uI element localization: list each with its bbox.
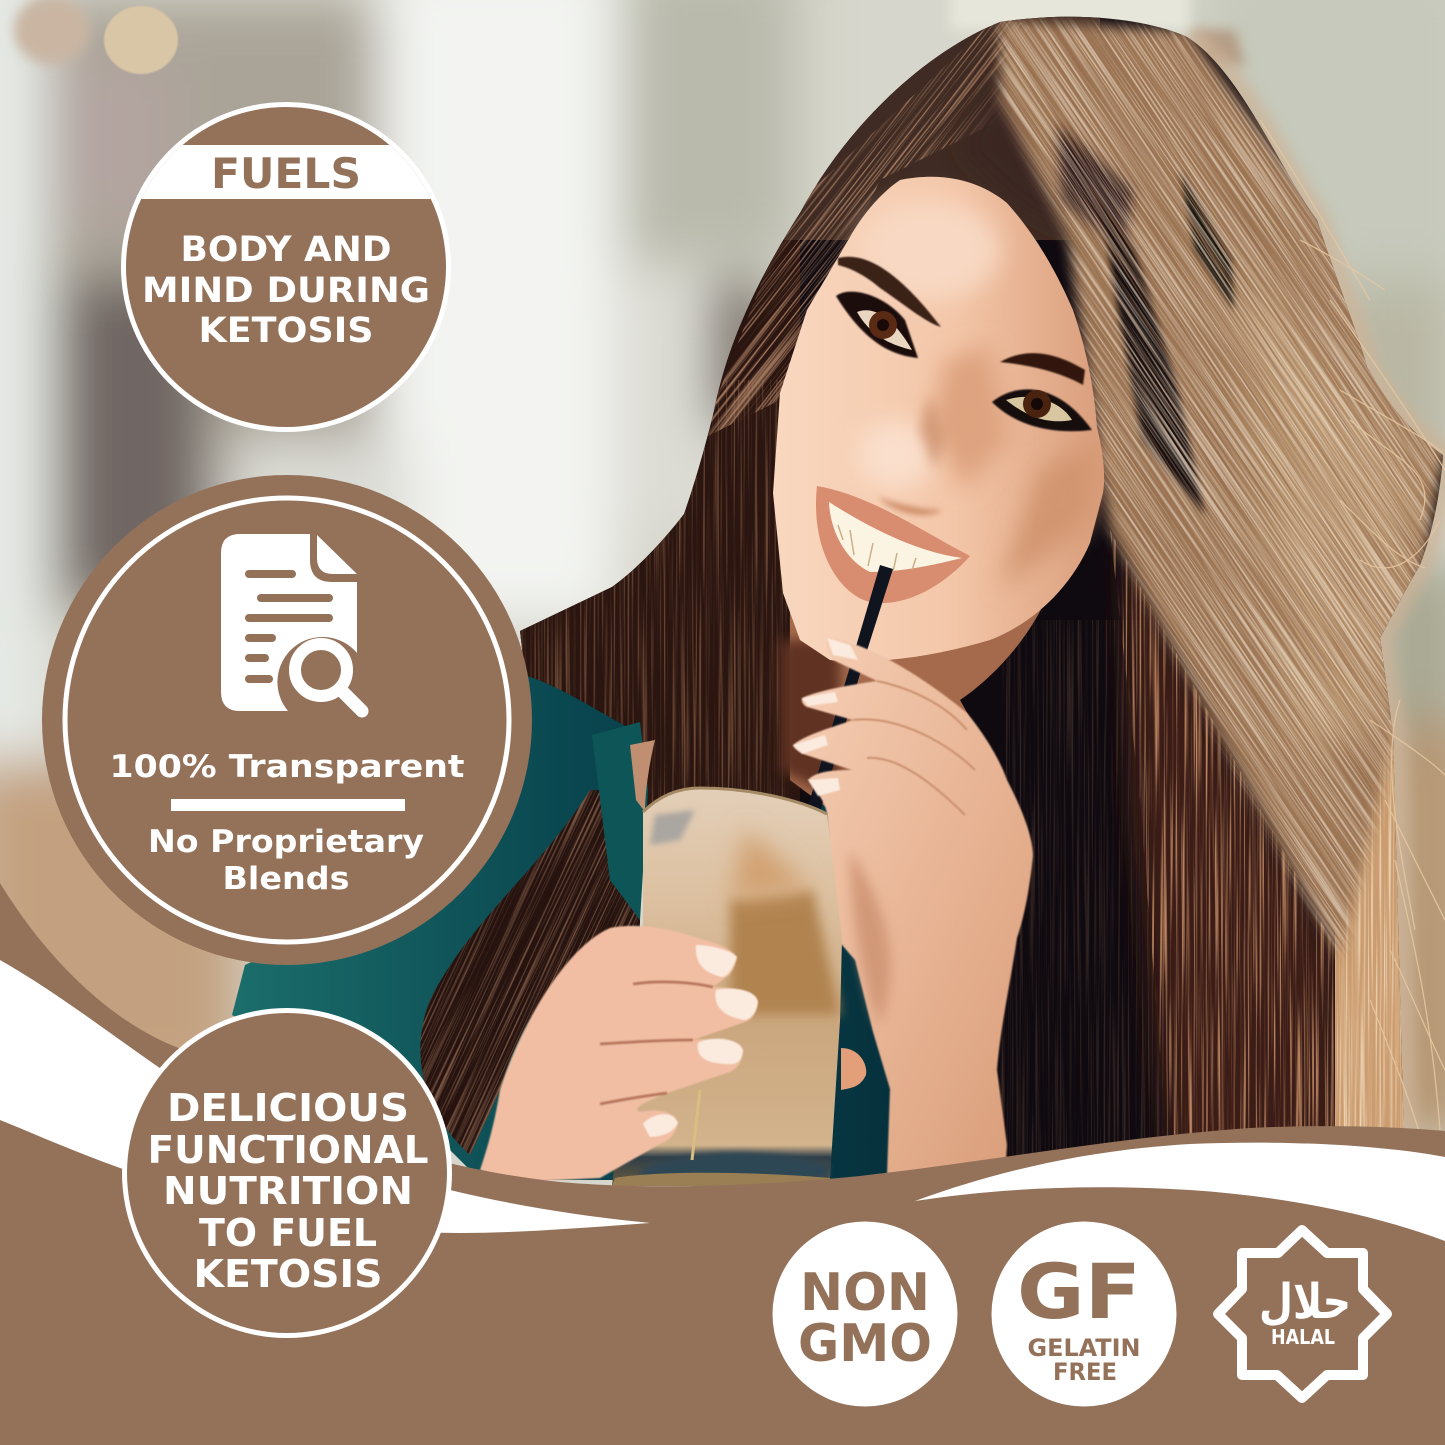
panel: fuels badge bbox=[120, 102, 452, 432]
hair: main mass bbox=[520, 16, 1443, 1157]
text: halal: HALAL bbox=[1271, 1325, 1335, 1349]
hair: left lock bbox=[420, 790, 640, 1155]
text: no proprietary blends: No Proprietary bbox=[148, 824, 424, 860]
text: body and mind during ketosis: KETOSIS bbox=[198, 311, 374, 351]
text: body and mind during ketosis bbox=[142, 230, 430, 351]
face bbox=[773, 177, 1104, 661]
text: no proprietary blends: Blends bbox=[222, 861, 350, 897]
brown wave band bbox=[0, 883, 1445, 1445]
text: body and mind during ketosis: MIND DURING bbox=[142, 271, 430, 311]
badge: non gmo: GMO bbox=[798, 1314, 932, 1374]
badge: gelatin free: FREE bbox=[1053, 1358, 1117, 1386]
white wave left bbox=[0, 960, 650, 1233]
eyebrows bbox=[838, 257, 1085, 385]
text: no proprietary blends bbox=[148, 824, 424, 897]
wispy flyaway hair bbox=[1260, 120, 1445, 1135]
panel: delicious functional nutrition badge bbox=[122, 1008, 452, 1338]
shirt collar bbox=[592, 722, 648, 920]
eyes bbox=[836, 292, 1092, 431]
panel: delicious functional nutrition badge: FUNCTIONAL bbox=[148, 1128, 428, 1172]
badge: gelatin free bbox=[992, 1222, 1176, 1406]
badge: non gmo bbox=[772, 1222, 958, 1406]
iced coffee glass bbox=[612, 788, 842, 1186]
soft fringe of flyaway hair bbox=[1187, 37, 1443, 1130]
divider bbox=[171, 799, 405, 811]
text: body and mind during ketosis: BODY AND bbox=[180, 230, 392, 270]
panel: delicious functional nutrition badge: DELICIOUS bbox=[167, 1086, 409, 1130]
lower hand with fingers bbox=[480, 926, 758, 1182]
shirt bbox=[232, 665, 905, 1180]
heading: fuels: FUELS bbox=[211, 149, 361, 198]
badge: gelatin free: GELATIN bbox=[1028, 1334, 1140, 1362]
mouth bbox=[816, 486, 970, 603]
panel: delicious functional nutrition badge: NUTRITION bbox=[163, 1169, 413, 1213]
text: 100% transparent: 100% Transparent bbox=[110, 749, 465, 785]
text: halal arabic: حلال bbox=[1259, 1274, 1351, 1330]
panel: delicious functional nutrition badge: TO FUEL bbox=[199, 1211, 377, 1255]
badge: non gmo: NON bbox=[800, 1263, 930, 1323]
icon: document with magnifier bbox=[221, 534, 362, 711]
thumb behind glass bbox=[841, 1048, 866, 1090]
straw bbox=[808, 565, 893, 812]
panel: delicious functional nutrition badge: KETOSIS bbox=[194, 1252, 382, 1296]
upper hand with fingers bbox=[793, 638, 1033, 1175]
white wave right bbox=[915, 1143, 1445, 1241]
neck bbox=[790, 590, 1050, 810]
badge: halal star bbox=[1218, 1230, 1387, 1398]
panel: transparency badge bbox=[42, 475, 532, 965]
badge: gelatin free: GF bbox=[1017, 1247, 1141, 1336]
